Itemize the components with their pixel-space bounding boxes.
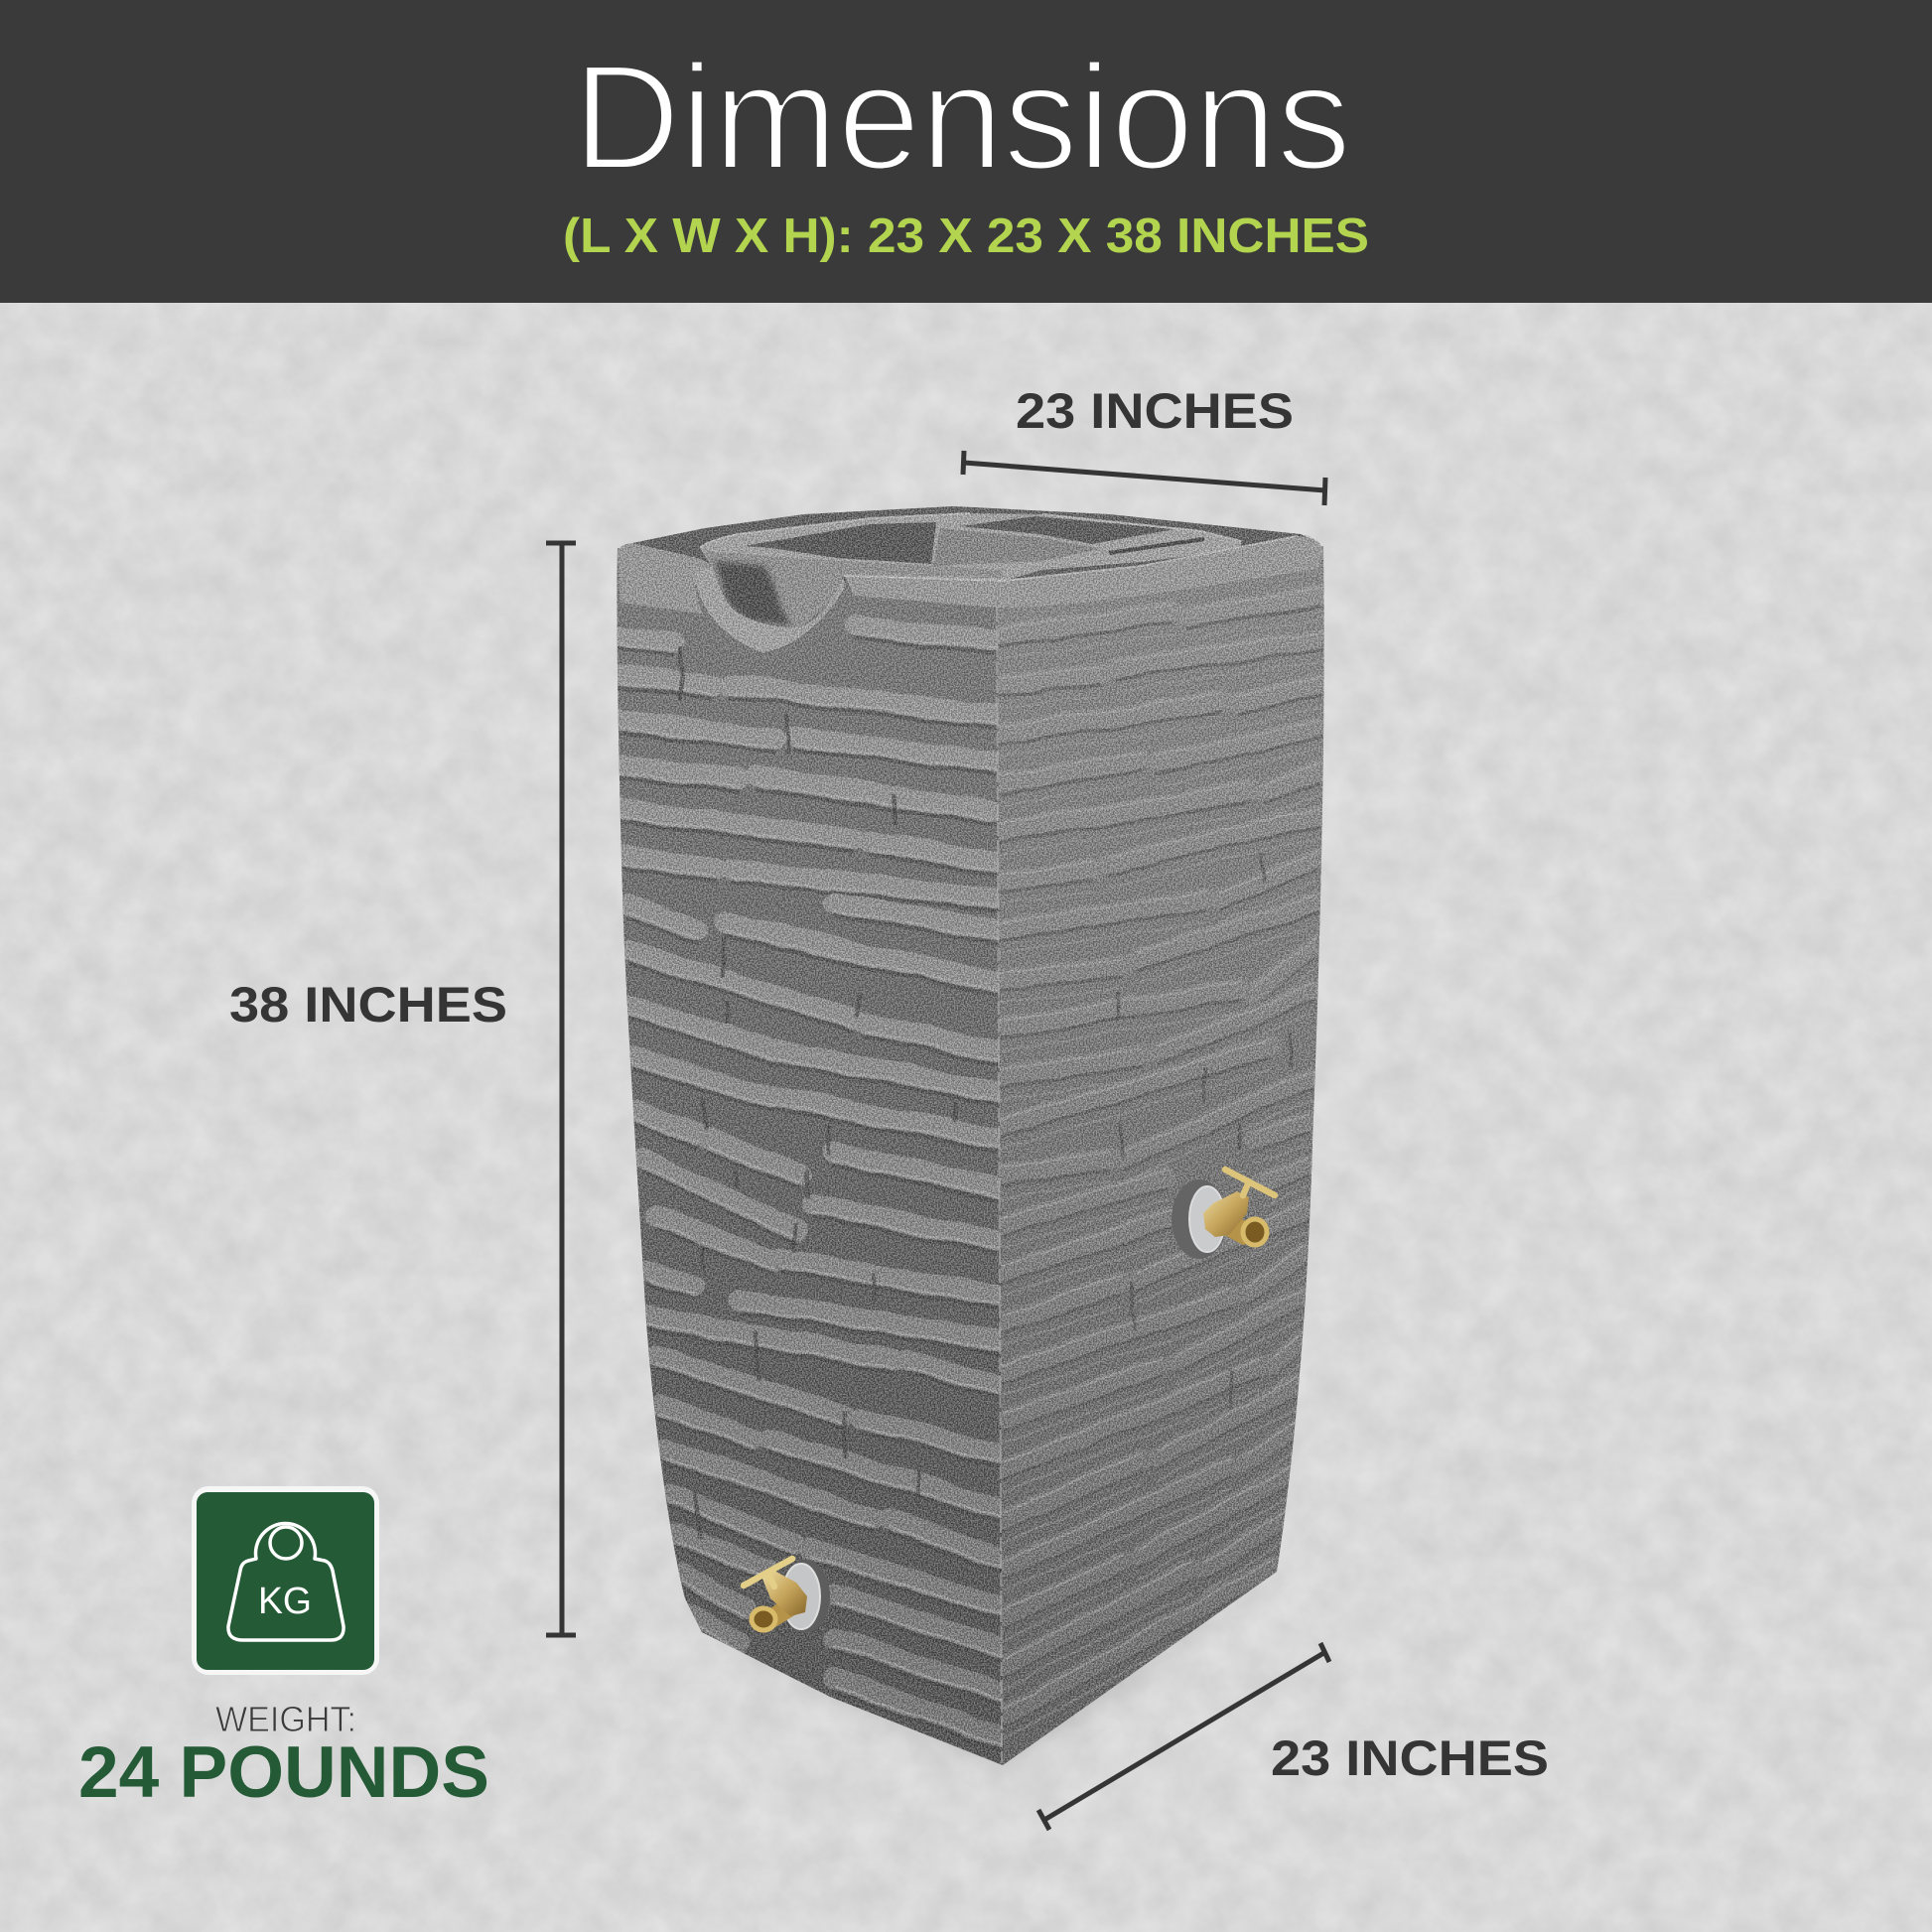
rim gutter <box>632 506 1320 586</box>
mounting recess <box>1172 1179 1227 1259</box>
right faucet <box>1172 1170 1275 1259</box>
valve body <box>1203 1191 1249 1237</box>
tile border <box>192 1486 379 1675</box>
speckled stone grain <box>606 496 1335 1777</box>
label: base depth: 23 INCHES <box>1271 1730 1549 1786</box>
barrel right face <box>993 536 1335 1777</box>
divider compartment <box>960 516 1174 544</box>
spout inner wall <box>705 551 1003 627</box>
silver plate <box>782 1564 820 1629</box>
spout mouth <box>752 1608 775 1630</box>
divider block <box>933 528 1102 566</box>
label: height: 38 INCHES <box>229 977 507 1033</box>
left faucet <box>744 1559 830 1633</box>
rim highlight <box>700 513 1298 581</box>
subtitle: overall dimensions: (L X W X H): 23 X 23 X 38 INCHES <box>563 209 1369 263</box>
KG text: KG <box>258 1581 312 1622</box>
valve body <box>762 1571 807 1616</box>
mounting recess <box>780 1560 830 1633</box>
icon: kg weight tile <box>192 1486 379 1675</box>
barrel left face <box>606 536 1013 1777</box>
left front rim band <box>618 543 711 614</box>
kettle weight outline <box>228 1524 344 1640</box>
dimension line: height <box>546 543 576 1635</box>
weight label: WEIGHT: <box>215 1699 356 1739</box>
spout <box>1217 1213 1257 1245</box>
handle <box>744 1559 792 1587</box>
inner rim shadow line <box>1109 539 1204 553</box>
dimension line: base depth <box>1038 1643 1329 1830</box>
right front rim band <box>844 536 1323 608</box>
spout mouth <box>1243 1219 1267 1245</box>
barrel corner edge <box>997 608 1002 1763</box>
barrel top rim <box>618 506 1323 652</box>
inner basin rim <box>700 513 1242 581</box>
spout shadow <box>715 561 791 625</box>
spout <box>757 1594 796 1630</box>
title: Dimensions <box>573 33 1351 201</box>
weight value: 24 POUNDS <box>78 1732 489 1813</box>
tile fill <box>197 1492 374 1670</box>
label: top width: 23 INCHES <box>1016 383 1294 439</box>
silver plate <box>1189 1186 1225 1252</box>
spout lip <box>695 566 844 652</box>
product: stacked-stone rain barrel <box>606 496 1335 1777</box>
handle <box>1225 1170 1275 1195</box>
dimension line: top width <box>963 451 1325 505</box>
inner basin well <box>745 522 936 564</box>
barrel ground shadow <box>702 1579 1277 1772</box>
header band <box>0 0 1932 303</box>
